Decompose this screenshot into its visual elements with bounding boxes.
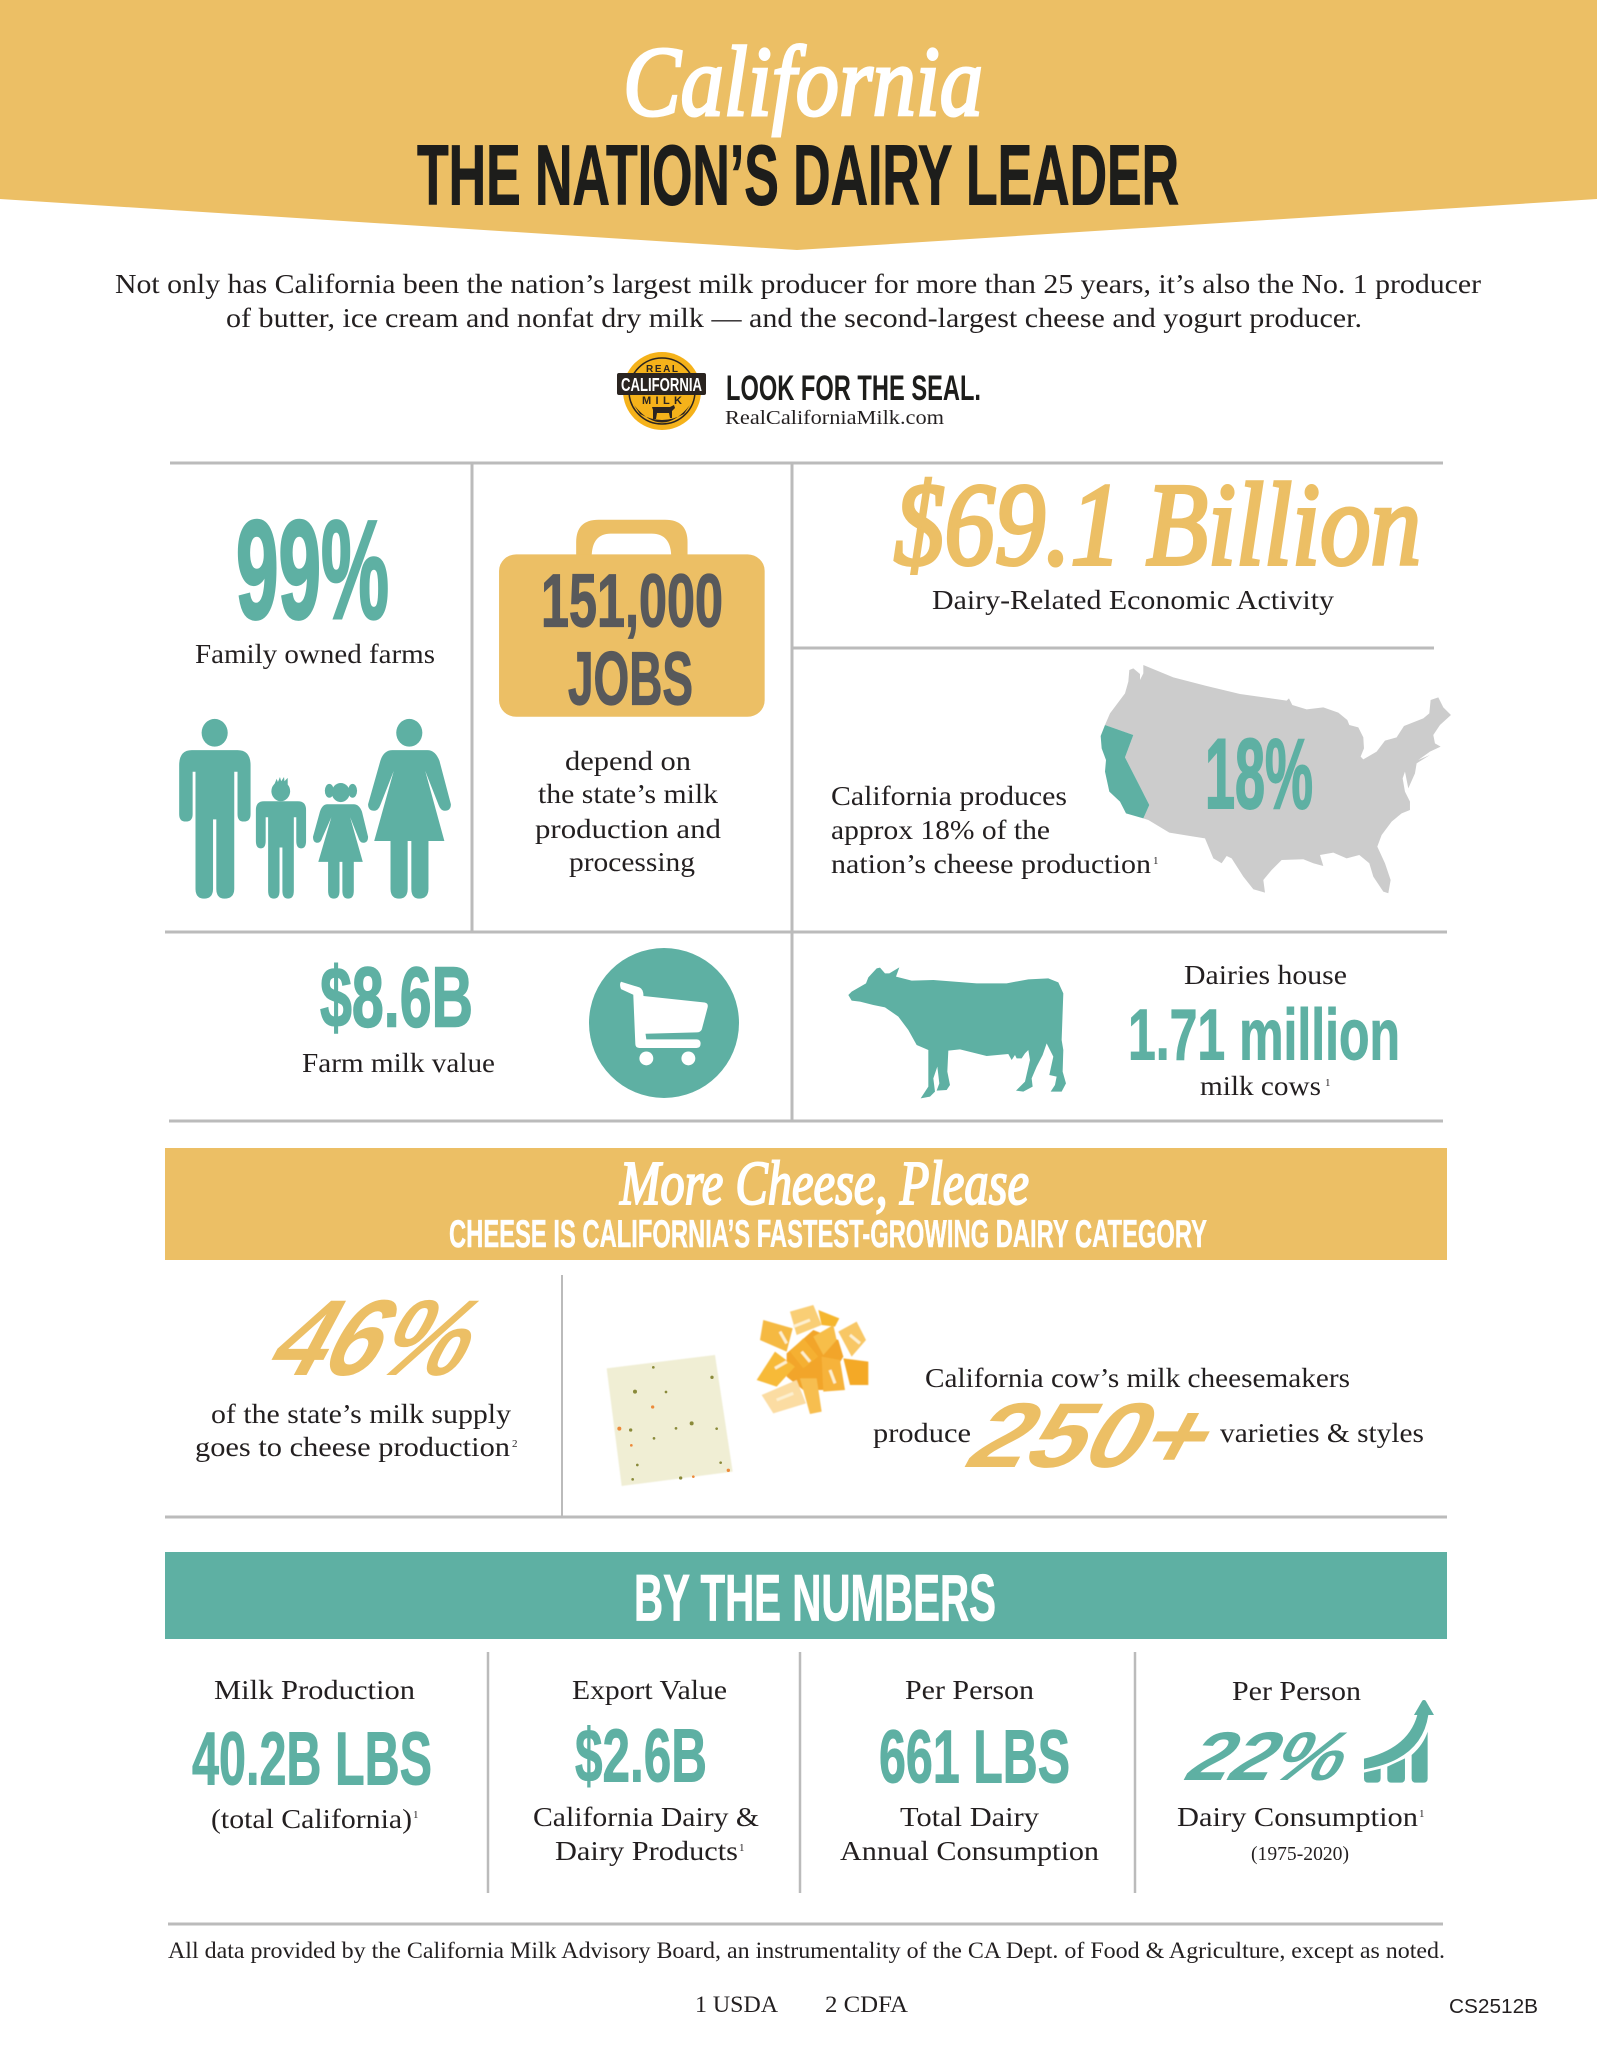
label: export value: Export Value: [572, 1675, 727, 1705]
stat: 46%: 46%: [250, 1279, 507, 1398]
section banner: more cheese: [165, 1148, 1447, 1260]
stat: $69.1 Billion: $69.1 Billion: [894, 459, 1421, 590]
stat: $8.6B: $8.6B: [320, 950, 473, 1046]
footnotes: [695, 1992, 908, 2017]
icon: Real California Milk seal: REAL: [646, 364, 678, 375]
stat: 40.2B LBS: 40.2B LBS: [192, 1716, 432, 1800]
cheese production description: approx 18% of the: [831, 815, 1050, 845]
label: total California: (total California): [211, 1804, 412, 1834]
jobs description: depend on: [565, 746, 692, 776]
icon: rising arrow with bars: [1364, 1700, 1434, 1783]
panel: milk cows: [848, 960, 1400, 1101]
export description: 1: [739, 1842, 744, 1854]
label: produce: produce: [873, 1418, 971, 1448]
consumption description: [840, 1802, 1100, 1866]
cheese production description: California produces: [831, 781, 1067, 811]
stat: 151,000: 151,000: [541, 558, 723, 642]
cheese production description: nation’s cheese production: [831, 849, 1152, 879]
stat: 18%: 18%: [1205, 718, 1313, 829]
icon: family: [179, 719, 451, 899]
icon: Real California Milk seal: [617, 352, 706, 430]
label: milk production: Milk Production: [214, 1675, 416, 1705]
jobs description: the state’s milk: [538, 779, 719, 809]
icon: Real California Milk seal: CALIFORNIA: [621, 375, 702, 395]
label: family owned farms: Family owned farms: [195, 639, 435, 669]
panel: milk production: [192, 1675, 432, 1834]
heading: by the numbers: BY THE NUMBERS: [634, 1560, 996, 1634]
jobs description: processing: [569, 847, 695, 877]
share description: [195, 1399, 518, 1462]
website: RealCaliforniaMilk.com: [725, 407, 944, 429]
cheese production description: [831, 781, 1158, 879]
years label: (1975-2020): [1251, 1843, 1349, 1865]
panel dividers: cheese: [165, 1275, 1447, 1517]
panel: dairy consumption growth: [1173, 1676, 1434, 1865]
intro text: of butter, ice cream and nonfat dry milk — and the second-largest cheese and yogurt producer.: [226, 303, 1362, 333]
consumption label: 1: [1419, 1808, 1424, 1820]
intro text: [115, 269, 1481, 333]
export description: California Dairy &: [533, 1802, 759, 1832]
share description: goes to cheese production: [195, 1432, 511, 1462]
label: per person: Per Person: [905, 1675, 1035, 1705]
share description: of the state’s milk supply: [211, 1399, 512, 1429]
script heading: more cheese, please: More Cheese, Please: [619, 1150, 1029, 1218]
seal headline: LOOK FOR THE SEAL.: [726, 369, 981, 408]
footer rule: [168, 1922, 1443, 1926]
stat: 1.71 million: 1.71 million: [1128, 996, 1400, 1076]
grid lines top section: [165, 463, 1447, 1121]
stat: $2.6B: $2.6B: [575, 1714, 707, 1798]
label: dairy-related economic activity: Dairy-Related Economic Activity: [932, 585, 1335, 615]
intro text: Not only has California been the nation’s largest milk producer for more than 25 years, it’s also the No. 1 producer: [115, 269, 1481, 299]
jobs description: [535, 746, 722, 877]
footer source note: All data provided by the California Milk Advisory Board, an instrumentality of the CA Dept. of Food & Agriculture, except as noted.: [168, 1938, 1445, 1963]
jobs description: production and: [535, 814, 722, 844]
panel: farm milk value: [302, 948, 739, 1098]
footnotes: 1 USDA: [695, 1992, 778, 2017]
panel: total dairy per person: [840, 1675, 1100, 1866]
panel: share of milk to cheese: [195, 1279, 518, 1462]
stat: 661 LBS: 661 LBS: [879, 1714, 1070, 1798]
script title: California: California: [623, 26, 983, 137]
numbers column dividers: [488, 1652, 1135, 1893]
stat: 99%: 99%: [236, 491, 389, 648]
label: total California: 1: [413, 1809, 418, 1821]
consumption description: Total Dairy: [900, 1802, 1040, 1832]
panel: export value: [533, 1675, 759, 1866]
seal and call to action: [617, 352, 981, 430]
icon: shopping cart: [589, 948, 739, 1098]
stat: 22%: 22%: [1173, 1717, 1368, 1795]
panel: 151,000 jobs: [499, 520, 765, 877]
panel: family owned farms: [179, 491, 451, 899]
label: per person: Per Person: [1232, 1676, 1362, 1706]
document code: CS2512B: [1449, 1996, 1538, 2018]
icon: Real California Milk seal: MILK: [642, 395, 682, 407]
label: dairies house: Dairies house: [1184, 960, 1347, 990]
header banner: [0, 0, 1597, 250]
label: cheesemakers: California cow’s milk cheesemakers: [925, 1363, 1350, 1393]
label: varieties and styles: varieties & styles: [1220, 1418, 1424, 1448]
label: milk cows: 1: [1325, 1077, 1330, 1089]
consumption label: Dairy Consumption: [1177, 1802, 1419, 1832]
panel: economic activity: [894, 459, 1421, 615]
illustration: cheese block and cubes: [607, 1305, 868, 1486]
consumption description: Annual Consumption: [840, 1836, 1100, 1866]
map: United States with California highlighted: [1101, 665, 1451, 893]
footnotes: 2 CDFA: [825, 1992, 908, 2017]
export description: [533, 1802, 759, 1866]
export description: Dairy Products: [555, 1836, 738, 1866]
label: milk cows: milk cows: [1200, 1071, 1321, 1101]
label: farm milk value: Farm milk value: [302, 1048, 495, 1078]
panel: cheese production share: [831, 665, 1451, 893]
stat: jobs: JOBS: [568, 636, 693, 720]
icon: cow: [848, 967, 1066, 1098]
share description: 2: [512, 1438, 518, 1450]
section banner: by the numbers: [165, 1552, 1447, 1639]
icon: briefcase: [499, 520, 765, 717]
panel: cheese varieties: [607, 1305, 1424, 1487]
stat: 250+: 250+: [951, 1384, 1239, 1487]
cheese production description: 1: [1153, 855, 1158, 867]
